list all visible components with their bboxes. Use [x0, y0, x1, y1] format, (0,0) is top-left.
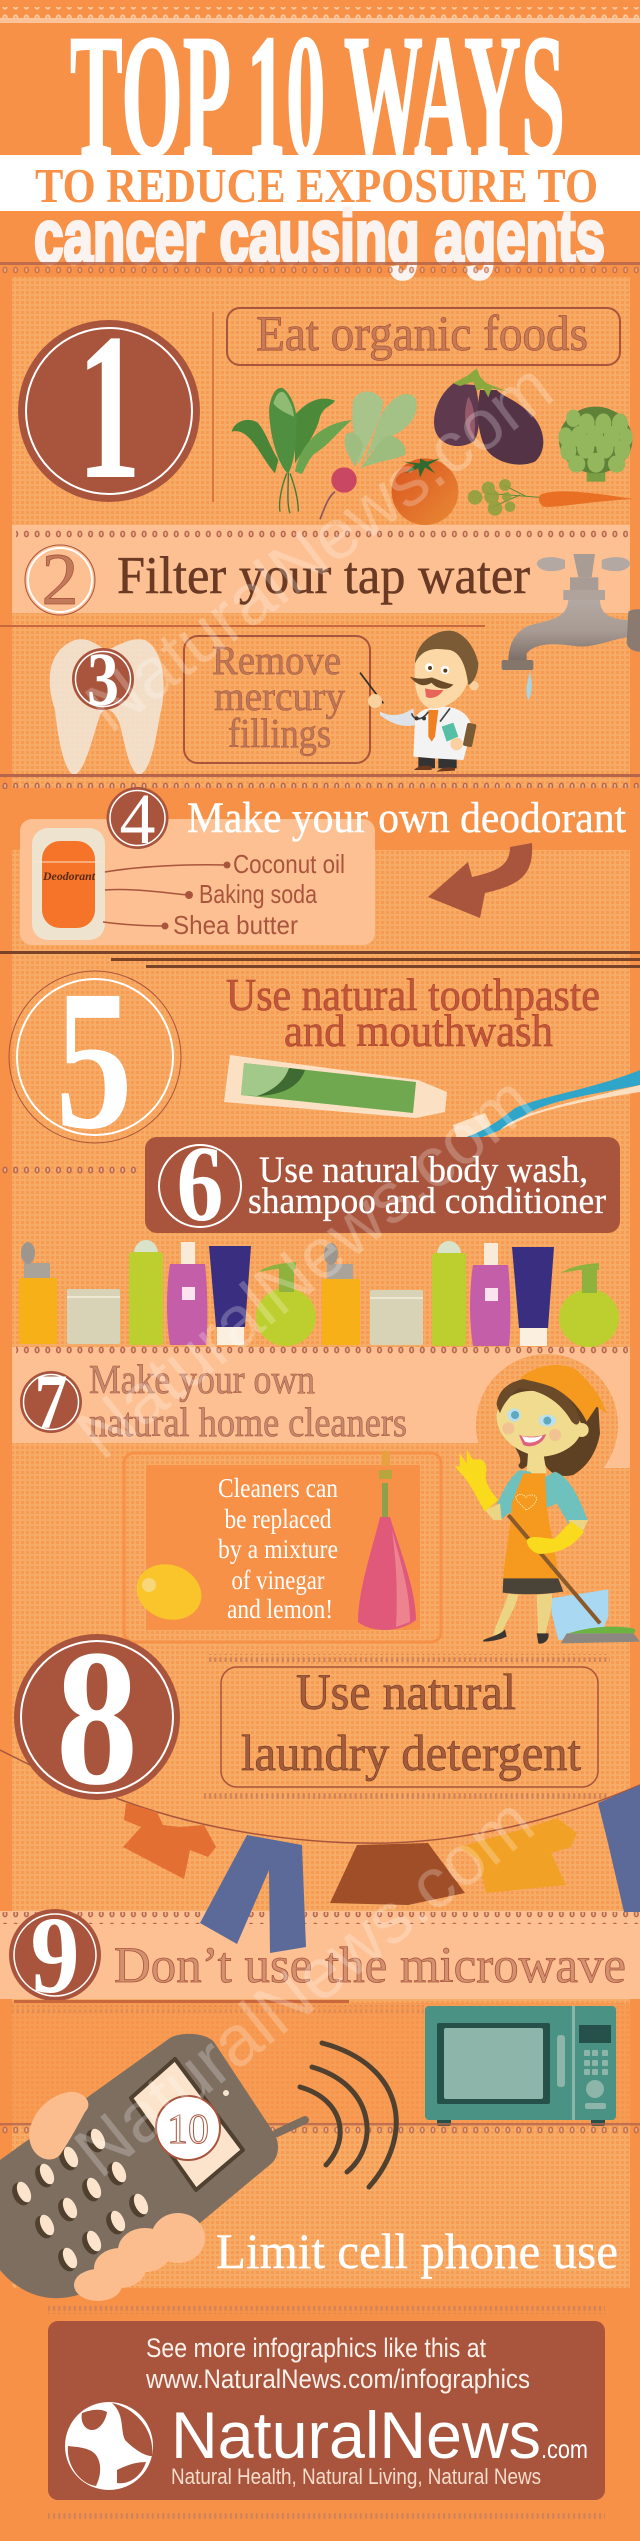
heading [226, 970, 600, 1056]
heading box: fillings [228, 710, 331, 756]
number 9 badge: 9 [30, 1894, 80, 2016]
clothesline [0, 1750, 640, 1843]
brown skirt [330, 1843, 465, 1905]
logo: globe [65, 2402, 153, 2490]
icon: microwave [425, 2006, 616, 2126]
number 4 badge [106, 779, 168, 859]
heading: Use natural body wash, [259, 1150, 588, 1191]
watermarks [61, 348, 567, 2193]
heading box: Use natural [296, 1665, 516, 1721]
heading [89, 1356, 407, 1445]
vegetables illustration [232, 368, 633, 525]
step 9: don't use the microwave [0, 1894, 640, 2016]
blue jeans [200, 1835, 306, 1953]
step 2: filter your tap water [0, 525, 640, 700]
watermarks: NaturalNews.com [61, 1782, 548, 2193]
number 2 badge [25, 539, 95, 621]
number 5 badge: 5 [56, 950, 132, 1171]
icon: purple bottle [167, 1242, 207, 1345]
heading: Make your own deodorant [187, 795, 626, 842]
bottles row repeat [322, 1241, 619, 1347]
step 5: natural toothpaste and mouthwash [9, 950, 640, 1171]
callout text [218, 1473, 338, 1624]
footer text: See more infographics like this at [146, 2333, 486, 2363]
light band [12, 1347, 630, 1468]
arrow [428, 843, 532, 918]
footer panel [48, 2321, 605, 2500]
number 10 badge: 10 [167, 2107, 209, 2153]
bottles row [19, 1240, 316, 1346]
icon: soap pump [256, 1262, 316, 1346]
heading: natural home cleaners [89, 1399, 407, 1445]
eggplant [434, 368, 543, 465]
number 2 badge: 2 [42, 539, 78, 621]
step 1: eat organic foods [18, 291, 633, 525]
yellow shirt [459, 1818, 577, 1893]
logo: wordmark: .com [541, 2434, 588, 2464]
number 10 badge [156, 2096, 220, 2160]
radish [320, 391, 417, 519]
number 6 badge [159, 1125, 241, 1244]
ingredient labels [162, 849, 345, 940]
orange shirt [123, 1803, 216, 1879]
illustration: woman with mop [455, 1365, 640, 1644]
step 3: remove mercury fillings [50, 631, 479, 775]
icon: yellow tube [19, 1242, 57, 1344]
icon: purple bottle [470, 1243, 510, 1346]
step 6: natural body wash, shampoo and conditioner [19, 1125, 620, 1347]
number 7 badge [20, 1358, 82, 1445]
callout text: of vinegar [232, 1565, 325, 1595]
number 3 badge: 3 [87, 638, 119, 722]
callout text: and lemon! [227, 1594, 333, 1624]
step 7: natural home cleaners [12, 1344, 640, 1644]
laundry on the line [123, 1785, 640, 1953]
footer [48, 2306, 605, 2520]
number 1 badge: 1 [77, 291, 141, 523]
icon: vinegar bottle [358, 1451, 416, 1630]
icon: navy tube [512, 1247, 554, 1346]
number 7 badge: 7 [34, 1358, 68, 1445]
step 4: make your own deodorant [12, 779, 640, 945]
number 5 badge [9, 950, 181, 1171]
carrot [468, 479, 633, 516]
ingredient labels: Shea butter [173, 910, 298, 940]
cleaners panel [124, 1453, 441, 1642]
heading box [221, 1665, 598, 1787]
icon: lemon [129, 1555, 209, 1629]
heading box: mercury [214, 673, 345, 719]
footer text [145, 2333, 530, 2394]
spinach [232, 388, 352, 513]
heading: and mouthwash [284, 1006, 553, 1056]
icon: navy tube [209, 1246, 251, 1345]
light band [0, 1911, 640, 1999]
tomato [392, 458, 458, 525]
number 6 badge: 6 [176, 1125, 224, 1244]
icon: green bottle [432, 1241, 466, 1346]
heading: Filter your tap water [117, 547, 530, 605]
dark-orange zone behind microwave and phone [12, 2003, 630, 2125]
watermarks: NaturalNews.com [62, 1060, 547, 1474]
heading [248, 1150, 606, 1222]
footer text: www.NaturalNews.com/infographics [145, 2364, 530, 2394]
ingredients panel [20, 819, 375, 945]
icon: green bottle [129, 1240, 163, 1345]
logo: wordmark: NaturalNews [171, 2398, 541, 2472]
watermarks: NaturalNews.com [72, 348, 567, 748]
icon: soap pump [559, 1263, 619, 1347]
step 8: natural laundry detergent [0, 1610, 640, 1843]
icon: water faucet [502, 554, 640, 700]
heading: Don’t use the microwave [114, 1938, 626, 1994]
heading box [184, 636, 370, 763]
icon: deodorant stick [32, 828, 105, 940]
icon: cream jar [370, 1290, 423, 1345]
icon: yellow tube [322, 1243, 360, 1345]
ingredient labels: Baking soda [199, 879, 317, 909]
callout text: by a mixture [218, 1534, 338, 1564]
signal waves [300, 2043, 396, 2187]
icon: toothbrush [453, 1070, 640, 1143]
heading: shampoo and conditioner [248, 1181, 606, 1222]
icon: tooth [50, 639, 164, 775]
number 8 badge: 8 [56, 1610, 138, 1826]
heading: Limit cell phone use [216, 2223, 618, 2279]
header [0, 0, 640, 280]
right jeans [598, 1785, 640, 1912]
illustration: doctor [360, 631, 479, 772]
ingredient leader lines [103, 865, 226, 926]
panel [145, 1137, 620, 1233]
heading box: Remove [212, 637, 341, 683]
logo: tagline: Natural Health, Natural Living, Natural News [171, 2464, 541, 2489]
heading: Make your own [89, 1356, 315, 1402]
illustration: cell phone [0, 2034, 305, 2298]
heading box: Eat organic foods [256, 305, 588, 361]
number 3 badge [72, 638, 134, 722]
heading: Use natural toothpaste [226, 970, 600, 1020]
hand holding phone [29, 2092, 205, 2301]
number 8 badge [14, 1610, 180, 1826]
icon: cream jar [67, 1289, 120, 1344]
callout text: Cleaners can [218, 1473, 338, 1503]
heading box: laundry detergent [241, 1726, 581, 1782]
number 4 badge: 4 [120, 779, 156, 859]
callout text: be replaced [224, 1504, 332, 1534]
icon: deodorant stick: Deodorant [42, 869, 96, 883]
orange band [12, 788, 640, 850]
textured background panel [12, 277, 630, 2288]
number 9 badge [9, 1894, 101, 2016]
artichoke [558, 407, 633, 482]
step 10: limit cell phone use [0, 2034, 618, 2301]
light band [12, 525, 630, 613]
icon: toothpaste tube [224, 1055, 447, 1118]
ingredient labels: Coconut oil [233, 849, 345, 879]
number 1 badge [18, 291, 200, 523]
